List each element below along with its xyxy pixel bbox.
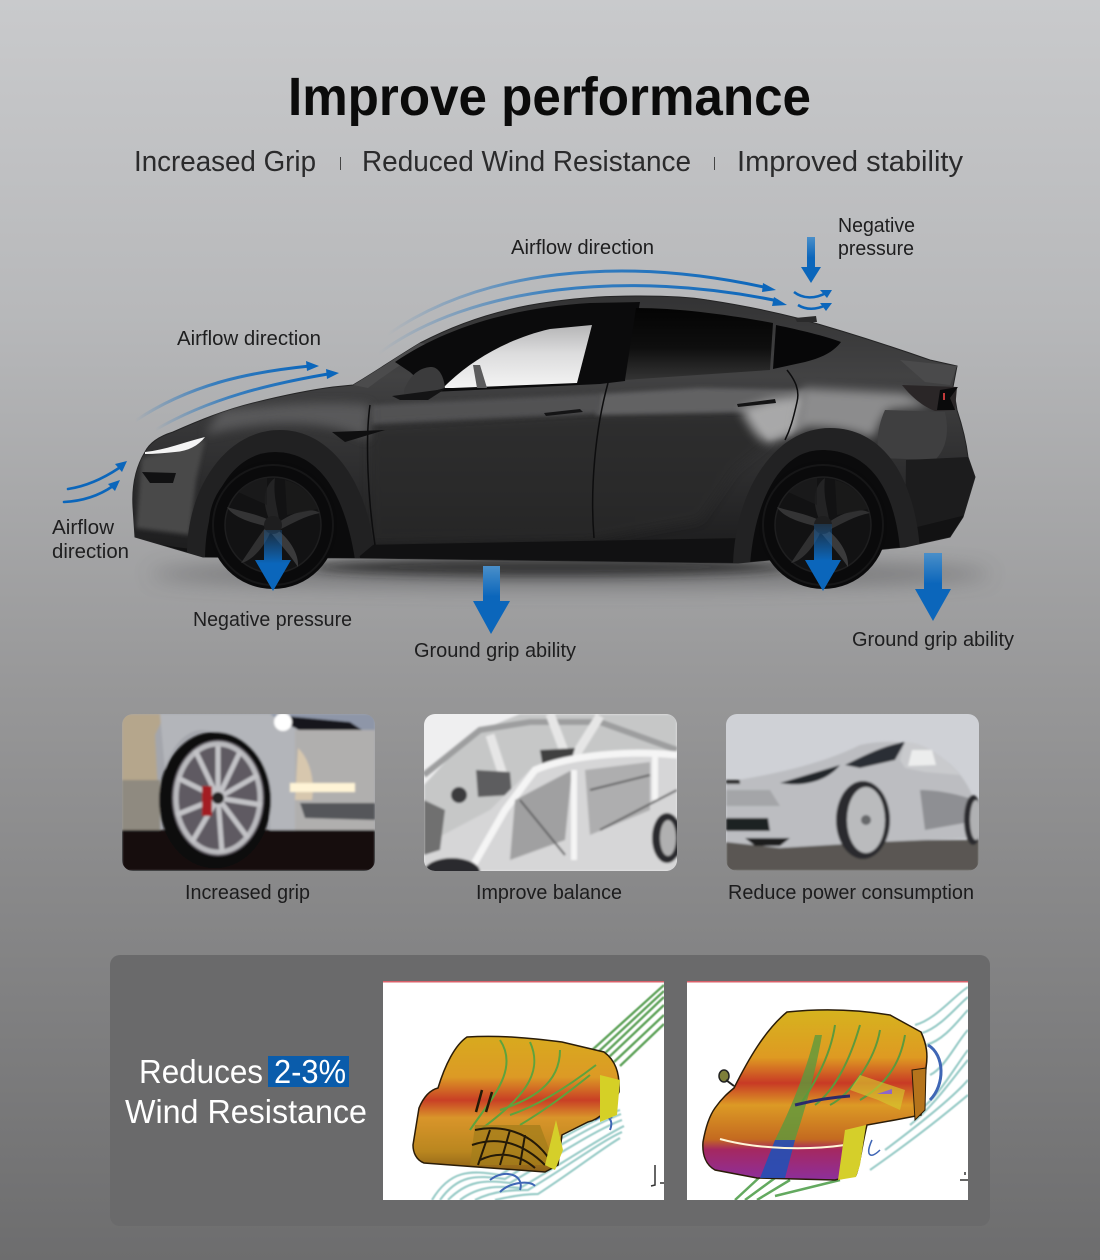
quarter glass (773, 325, 841, 369)
door handles (544, 399, 776, 416)
arrow: ground grip center (473, 566, 510, 634)
arrow: airflow over hood (135, 361, 339, 430)
simulation image: rear view (383, 981, 664, 1200)
headlight (145, 437, 205, 454)
arrow: negative pressure roof (794, 237, 832, 311)
wind resistance headline (125, 1053, 367, 1130)
diagram labels (52, 215, 1014, 662)
front grille slot (142, 472, 176, 483)
caption: improve balance: Improve balance (476, 882, 622, 904)
roof fin (795, 316, 817, 322)
panel: reduce power consumption photo (726, 714, 982, 871)
subtitle row: Increased Grip (134, 146, 316, 178)
simulation image: front view (687, 981, 968, 1200)
wheel arches (187, 428, 920, 565)
arrow: airflow over roof (378, 271, 787, 354)
subtitle row: Reduced Wind Resistance (362, 146, 691, 178)
roof and pillar dark band (395, 302, 640, 392)
front wheel (209, 461, 337, 589)
diagram labels: Airflow direction (177, 328, 321, 350)
rear wheel (759, 461, 887, 589)
spoiler (900, 360, 957, 385)
title: Improve performance (288, 67, 811, 127)
panel: wind resistance (110, 955, 990, 1226)
side mirror (404, 367, 445, 394)
fender badge (332, 430, 385, 442)
wind resistance headline: Wind Resistance (125, 1093, 367, 1130)
subtitle row: Improved stability (737, 146, 963, 178)
diagram labels: Negative (838, 215, 915, 237)
arrow: front wheel negative pressure (255, 530, 291, 591)
ground shadow (150, 558, 990, 587)
body highlights (135, 343, 975, 563)
arrow: rear wheel negative pressure (805, 524, 841, 591)
seat (473, 365, 487, 388)
diagram labels: Ground grip ability (414, 640, 576, 662)
arrow: airflow at front bumper (64, 461, 127, 502)
subtitle row (134, 146, 963, 178)
door seams (368, 370, 798, 545)
diagram labels: pressure (838, 238, 914, 260)
car body (133, 296, 975, 563)
diagram labels: Airflow direction (511, 237, 654, 259)
caption: increased grip: Increased grip (185, 882, 310, 904)
diagram labels: Ground grip ability (852, 629, 1014, 651)
car illustration (133, 296, 975, 589)
wind resistance headline: Reduces (139, 1053, 263, 1090)
panel: increased grip photo (122, 713, 375, 871)
caption: reduce power consumption: Reduce power consumption (728, 882, 974, 904)
wind resistance headline: 2-3% (274, 1053, 346, 1090)
arrow: ground grip rear (915, 553, 951, 621)
panel: improve balance photo (424, 714, 677, 871)
panel: car airflow diagram (52, 215, 1014, 662)
tail light (902, 385, 957, 411)
diagram labels: Negative pressure (193, 609, 352, 631)
rear glass (625, 308, 773, 380)
front door window (443, 325, 592, 388)
diagram labels: direction (52, 541, 129, 563)
diagram labels: Airflow (52, 517, 115, 539)
